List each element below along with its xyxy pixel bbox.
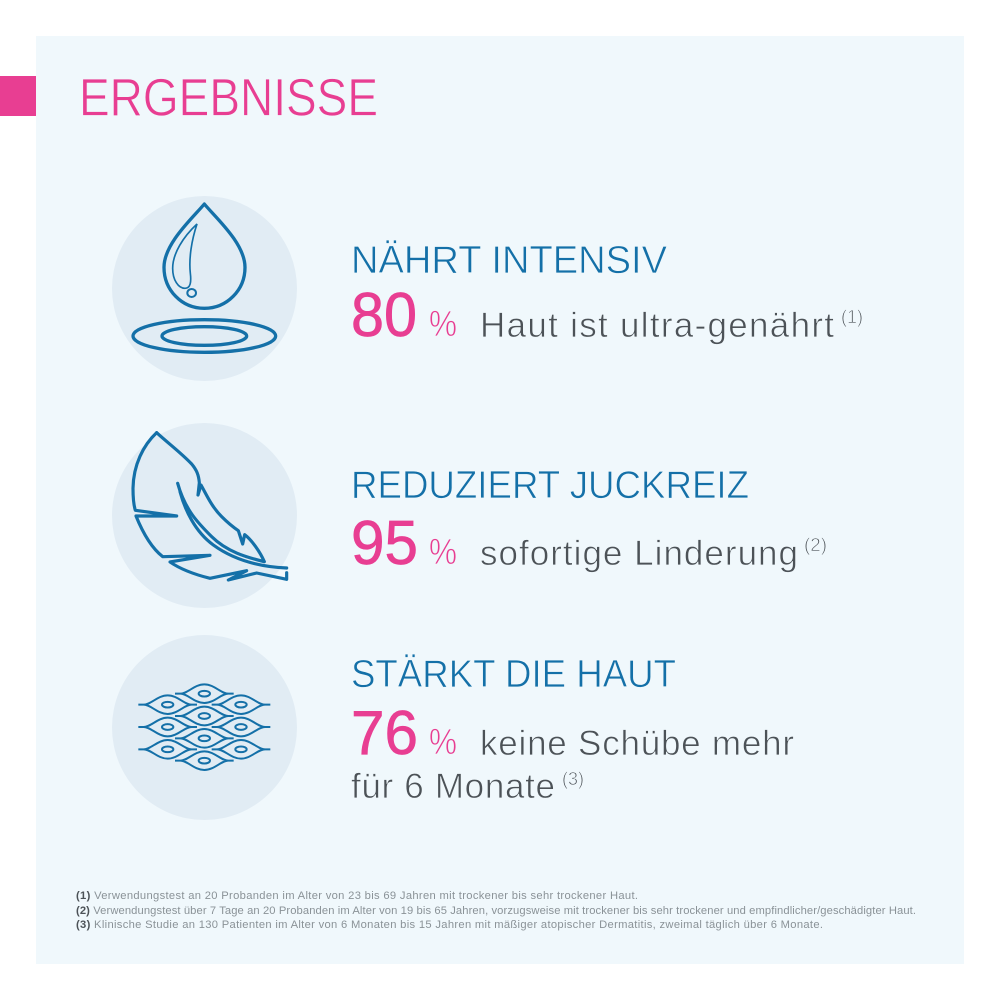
footnote mark 2: (2) [804, 535, 827, 555]
section: reduziert juckreiz icon [112, 423, 297, 608]
percent sign: % [429, 721, 457, 762]
description line 1: keine Schübe mehr [480, 724, 794, 763]
percent sign: % [429, 531, 457, 572]
statistic 76: 76 [351, 699, 418, 768]
percent sign: % [429, 303, 457, 344]
footnotes [76, 890, 916, 931]
title accent block [0, 76, 36, 116]
section: reduziert juckreiz text [351, 464, 827, 578]
section: stärkt die haut text [351, 653, 794, 806]
heading: REDUZIERT JUCKREIZ [351, 464, 749, 507]
icon: water drop [133, 204, 276, 352]
statistic 80: 80 [351, 281, 417, 350]
icon background circle [112, 635, 297, 820]
description: sofortige Linderung [480, 534, 798, 573]
footnote mark 3: (3) [562, 769, 584, 789]
heading: NÄHRT INTENSIV [351, 239, 667, 282]
heading: STÄRKT DIE HAUT [351, 653, 676, 696]
footnote mark 1: (1) [841, 307, 863, 327]
description line 2: für 6 Monate [351, 767, 555, 806]
footnote 3: (3) Klinische Studie an 130 Patienten im Alter von 6 Monaten bis 15 Jahren mit mäßiger atopischer Dermatitis, zweimal täglich über 6 Monate. [76, 919, 823, 931]
footnote 1: (1) Verwendungstest an 20 Probanden im Alter von 23 bis 69 Jahren mit trockener bis sehr trockener Haut. [76, 890, 638, 902]
icon: feather [133, 433, 287, 580]
statistic 95: 95 [351, 509, 418, 578]
section: nährt intensiv text [351, 239, 863, 350]
icon background circle [112, 196, 297, 381]
icon background circle [112, 423, 297, 608]
description: Haut ist ultra-genährt [480, 306, 834, 345]
footnote 2: (2) Verwendungstest über 7 Tage an 20 Probanden im Alter von 19 bis 65 Jahren, vorzugsweise mit trockener bis sehr trockener und empfindlicher/geschädigter Haut. [76, 905, 916, 917]
icon: skin cells [138, 684, 270, 770]
title: ERGEBNISSE [79, 68, 378, 128]
section: nährt intensiv icon [112, 196, 297, 381]
section: stärkt die haut icon [112, 635, 297, 820]
